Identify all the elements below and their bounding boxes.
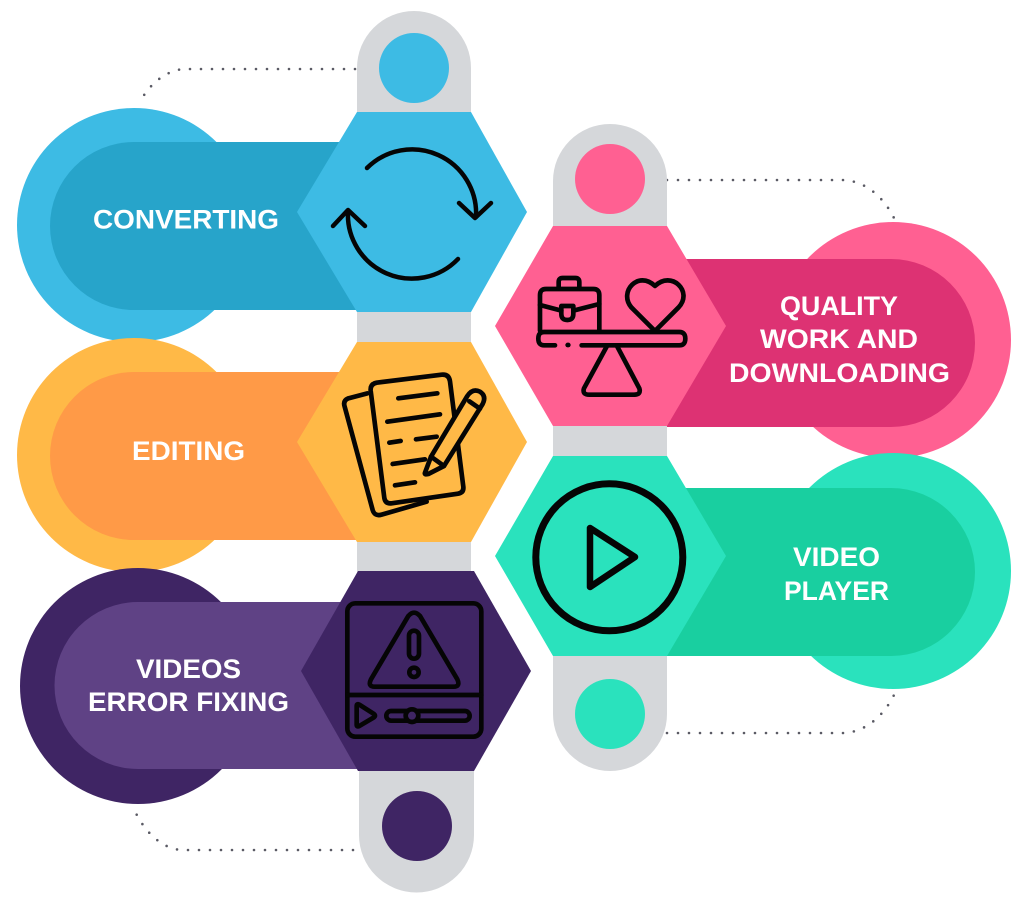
icon: video player warning (347, 603, 481, 737)
label: quality work and downloading: DOWNLOADING (729, 358, 950, 388)
label: videos error fixing: VIDEOS (136, 654, 241, 684)
icon: play button (536, 484, 683, 631)
green pill (667, 488, 975, 656)
dotted connector: error fixing (133, 807, 353, 850)
label: quality work and downloading: QUALITY (780, 291, 898, 321)
label: videos error fixing: ERROR FIXING (88, 687, 289, 717)
gray tab with pink dot (553, 124, 667, 460)
panel: video player (495, 453, 1011, 771)
gray connector (357, 530, 471, 575)
panel: editing (17, 338, 527, 575)
gray tab with blue dot (357, 11, 471, 345)
orange circle (17, 338, 251, 572)
pink hexagon (495, 226, 726, 426)
purple pill (55, 602, 400, 769)
green circle (775, 453, 1011, 689)
panel: videos error fixing (20, 568, 531, 892)
dotted connector: converting (139, 69, 355, 104)
gray tab with green dot (553, 640, 667, 771)
orange pill (50, 372, 400, 540)
label: video player: PLAYER (784, 576, 889, 606)
icon: refresh arrows (333, 149, 491, 279)
purple circle (20, 568, 256, 804)
green hexagon (495, 456, 726, 656)
purple hexagon (301, 571, 531, 771)
label: quality work and downloading: WORK AND (760, 324, 918, 354)
label: video player: VIDEO (793, 542, 880, 572)
icon: balance with briefcase and heart (538, 278, 685, 395)
label: editing: EDITING (132, 436, 245, 466)
gray tab with purple dot (359, 760, 474, 892)
blue hexagon (297, 112, 527, 312)
label: quality work and downloading (729, 291, 950, 388)
panel: quality work and downloading (495, 124, 1011, 460)
pink circle (775, 222, 1011, 458)
panel: converting (17, 11, 527, 345)
icon: documents and pencil (344, 375, 484, 515)
pink pill (667, 259, 975, 427)
label: converting: CONVERTING (93, 204, 279, 234)
blue circle (17, 108, 251, 342)
orange hexagon (297, 342, 527, 542)
label: video player (784, 542, 889, 606)
blue pill (50, 142, 400, 310)
dotted connector: video player (667, 695, 894, 733)
dotted connector: quality work (667, 180, 894, 218)
label: videos error fixing (88, 654, 289, 717)
